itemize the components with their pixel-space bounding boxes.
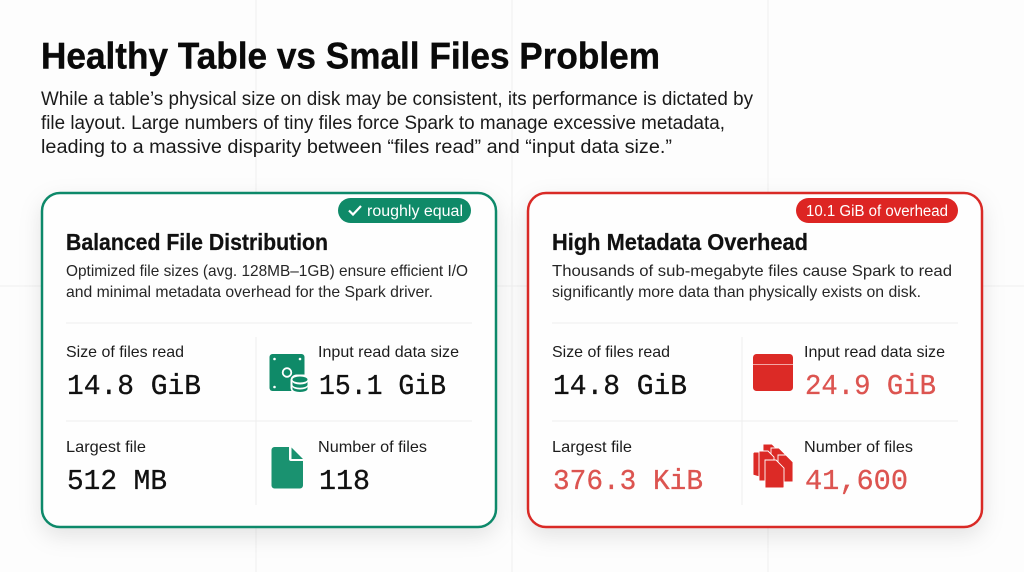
badge: roughly equal: roughly equal	[367, 203, 463, 220]
panel: balanced file distribution	[42, 193, 496, 527]
metric: largest file: Largest file	[66, 439, 146, 456]
metric: largest file	[66, 439, 167, 498]
intro text: While a table’s physical size on disk may be consistent, its performance is dictated by	[41, 89, 753, 110]
metric: input read data size: Input read data size	[804, 344, 945, 361]
panel heading: Balanced File Distribution	[66, 229, 328, 255]
panel heading: High Metadata Overhead	[552, 229, 808, 255]
panel description: Optimized file sizes (avg. 128MB–1GB) ensure efficient I/O	[66, 263, 468, 280]
metric: largest file: 512 MB	[67, 465, 167, 498]
card frame: green	[42, 193, 496, 527]
metric: number of files: Number of files	[804, 439, 913, 456]
metric: number of files: Number of files	[318, 439, 427, 456]
metric: number of files: 118	[319, 465, 370, 498]
metric: input read data size: 24.9 GiB	[805, 370, 936, 403]
metric: size of files read	[66, 344, 201, 403]
metric: largest file: Largest file	[552, 439, 632, 456]
metric: number of files	[804, 439, 913, 498]
panel: high metadata overhead	[528, 193, 982, 527]
panel description: significantly more data than physically exists on disk.	[552, 284, 921, 301]
badge: overhead	[796, 198, 958, 223]
metric: input read data size: 15.1 GiB	[319, 370, 446, 403]
metric: input read data size: Input read data size	[318, 344, 459, 361]
badge: overhead: 10.1 GiB of overhead	[806, 203, 948, 220]
intro text: leading to a massive disparity between “files read” and “input data size.”	[41, 137, 672, 158]
metric: size of files read: Size of files read	[66, 344, 184, 361]
title: Healthy Table vs Small Files Problem	[41, 36, 660, 76]
card frame: red	[528, 193, 982, 527]
metric: largest file	[552, 439, 703, 498]
metric: size of files read: Size of files read	[552, 344, 670, 361]
panel description	[66, 263, 468, 301]
icon: file with folded corner	[272, 447, 303, 489]
metric: largest file: 376.3 KiB	[553, 465, 703, 498]
metric: input read data size	[318, 344, 459, 403]
icon: disk with database	[270, 354, 310, 394]
metric: input read data size	[804, 344, 945, 403]
metric: number of files: 41,600	[805, 465, 908, 498]
icon: storage window	[753, 354, 793, 391]
metric: size of files read	[552, 344, 687, 403]
metric: number of files	[318, 439, 427, 498]
badge: roughly equal	[338, 198, 471, 223]
intro text	[41, 89, 753, 158]
metric: size of files read: 14.8 GiB	[67, 370, 201, 403]
panel description: and minimal metadata overhead for the Spark driver.	[66, 284, 433, 301]
icon: many files	[753, 444, 793, 488]
metric: size of files read: 14.8 GiB	[553, 370, 687, 403]
panel description: Thousands of sub-megabyte files cause Spark to read	[552, 263, 952, 280]
panel description	[552, 263, 952, 301]
intro text: file layout. Large numbers of tiny files force Spark to manage excessive metadata,	[41, 113, 725, 134]
